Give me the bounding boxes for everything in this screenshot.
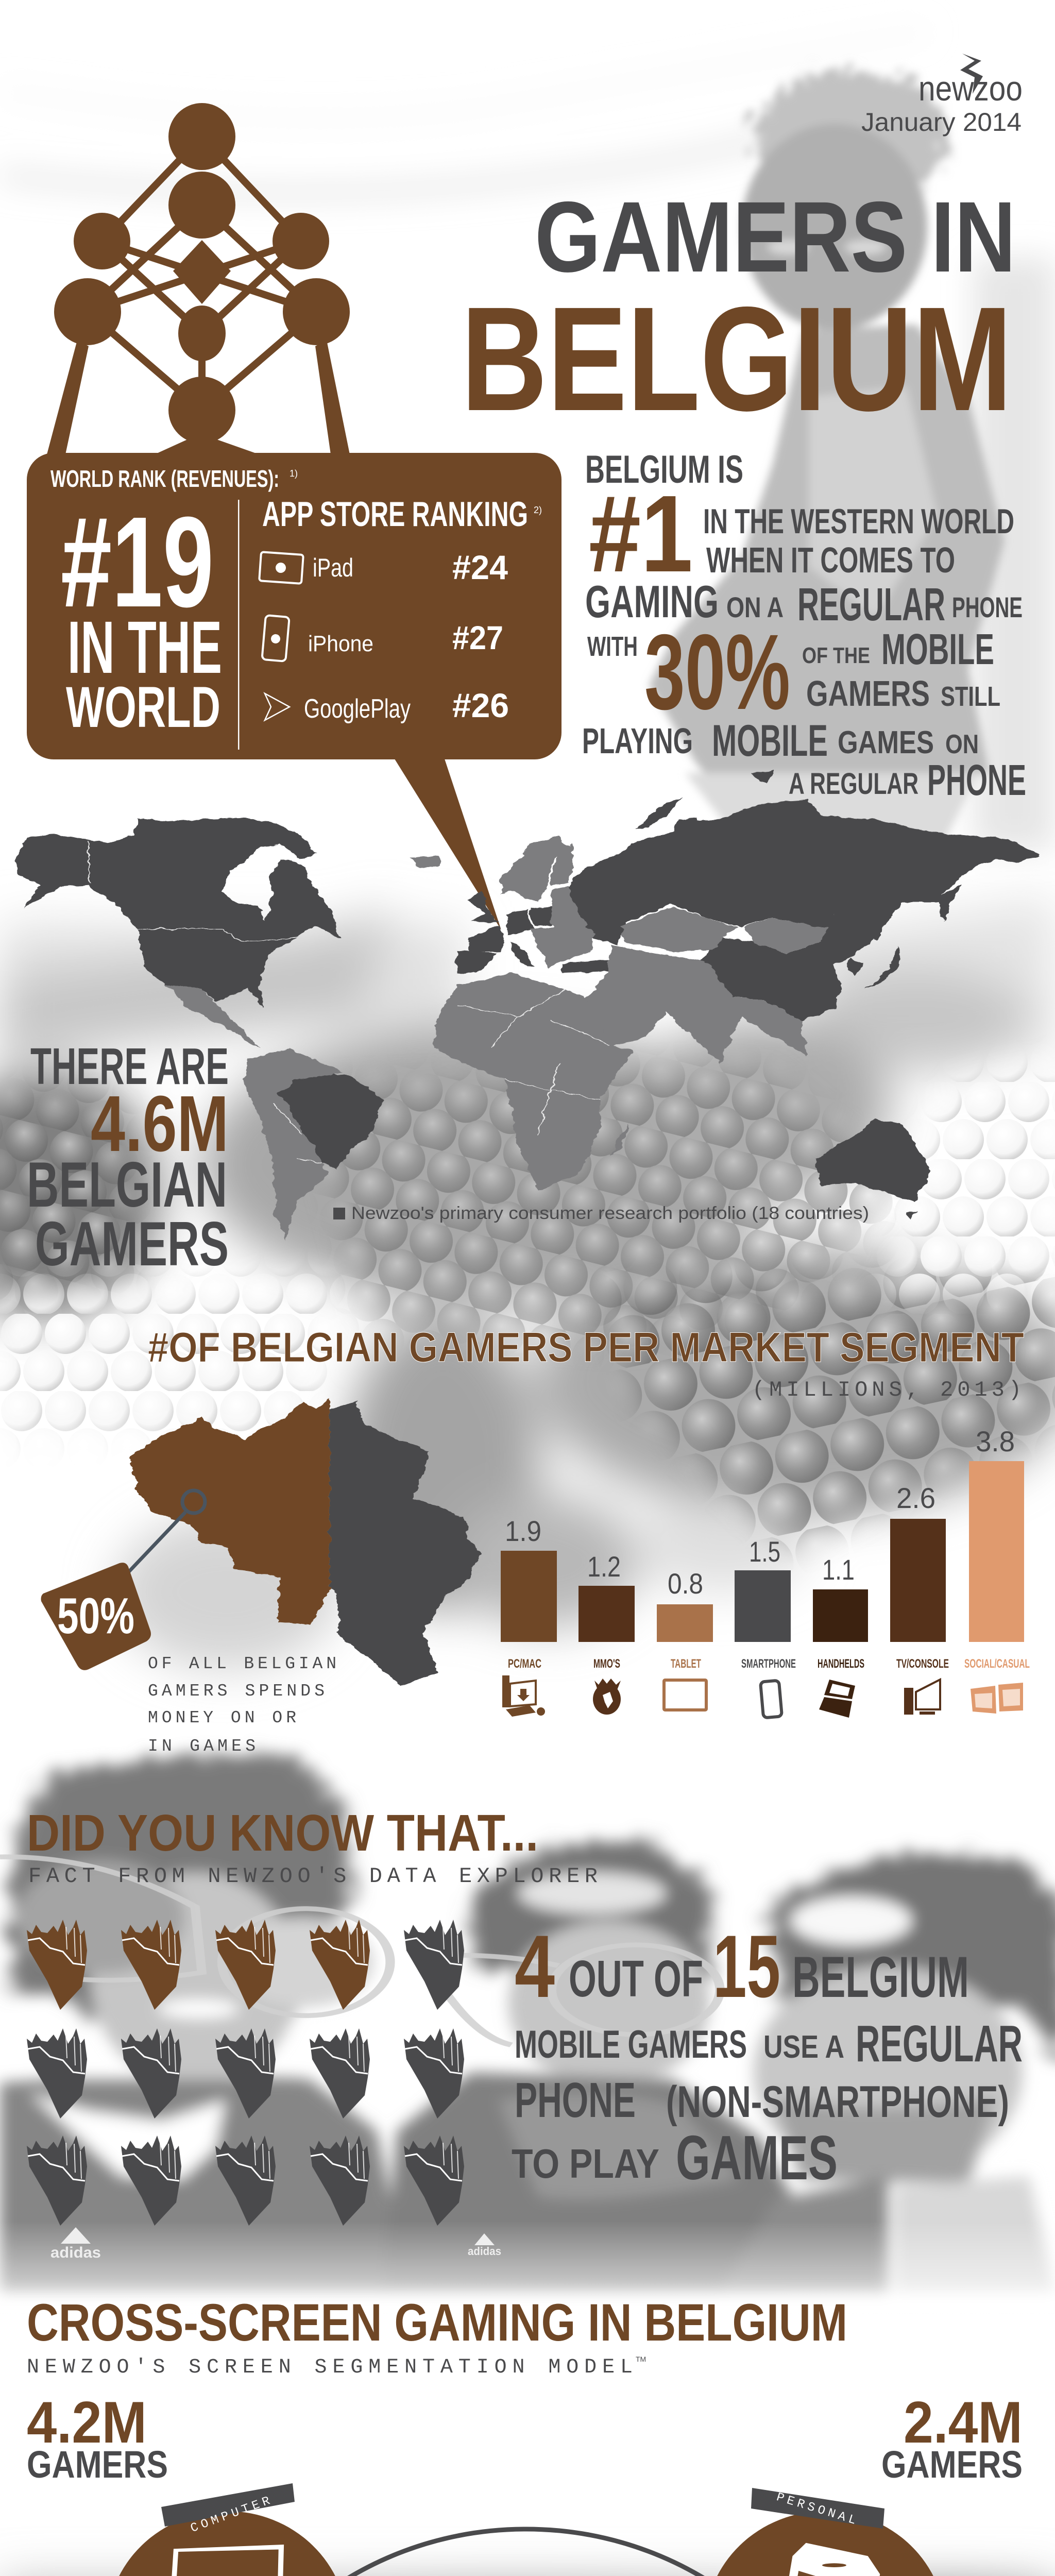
legend text: Newzoo's primary consumer research portfolio (18 countries) xyxy=(351,1204,869,1223)
text block: 4 out of 15: 15 xyxy=(713,1917,780,2016)
map: portfolio countries (dark) xyxy=(15,770,1040,1220)
bar: Handhelds: 1.1 xyxy=(822,1553,855,1586)
text block: 4 out of 15: MOBILE GAMERS xyxy=(515,2023,747,2066)
bar: Smartphone: SMARTPHONE xyxy=(741,1657,796,1671)
bar: Social/Casual: 3.8 xyxy=(976,1425,1015,1458)
text block: Belgium is #1: MOBILE xyxy=(881,625,994,673)
ribbon xyxy=(161,2483,295,2527)
bar: Handhelds: HANDHELDS xyxy=(818,1657,864,1671)
text block: Belgium is #1: WITH xyxy=(587,631,638,662)
bar chart: gamers per segment xyxy=(501,1425,1030,1671)
heading: did you know: DID YOU KNOW THAT... xyxy=(27,1804,538,1862)
bar: TV/Console xyxy=(890,1482,949,1671)
photo detail: adidas logos: adidas xyxy=(468,2245,501,2258)
text block: Belgium is #1: 30% xyxy=(644,613,790,732)
icon: Atomium xyxy=(47,103,350,454)
caption xyxy=(148,1654,336,1756)
divider xyxy=(238,500,239,750)
row: iPhone: iPhone xyxy=(308,631,373,656)
caption: MONEY ON OR xyxy=(148,1708,296,1727)
text block: Belgium is #1: ON xyxy=(945,730,979,759)
logo: newzoo top right xyxy=(918,54,1023,108)
heading: cross-screen gaming: CROSS-SCREEN GAMING IN BELGIUM xyxy=(27,2293,847,2352)
map: other countries (grey) xyxy=(165,835,827,1242)
rank value: WORLD xyxy=(66,675,220,739)
icon: phone xyxy=(770,2543,880,2576)
bar: Social/Casual xyxy=(964,1425,1030,1671)
screen: personal xyxy=(705,2488,946,2576)
background photo: Belgian supporters xyxy=(0,1750,1055,2334)
text block: 4 out of 15: GAMES xyxy=(676,2123,838,2193)
bar: MMO's xyxy=(578,1550,635,1671)
icon: MMO globe xyxy=(593,1679,621,1715)
50% value: 50% xyxy=(57,1587,134,1644)
bar: PC/MAC: PC/MAC xyxy=(508,1657,541,1671)
icon: Google Play xyxy=(265,693,290,720)
world rank heading: WORLD RANK (REVENUES): xyxy=(50,465,279,492)
app store heading: APP STORE RANKING xyxy=(262,495,528,534)
world rank heading: 1) xyxy=(290,468,298,479)
bubble body xyxy=(27,453,561,759)
subheading: fact: FACT FROM NEWZOO'S DATA EXPLORER xyxy=(28,1864,598,1889)
app store heading: 2) xyxy=(534,505,542,515)
text block: 4 out of 15 xyxy=(512,1917,1023,2193)
row: GooglePlay xyxy=(265,686,509,724)
bar: MMO's: MMO'S xyxy=(593,1657,620,1671)
text block: 4 out of 15: 4 xyxy=(515,1917,555,2016)
fries: remaining xyxy=(27,1920,464,2226)
text block: Belgium is #1: STILL xyxy=(941,681,1000,712)
photo detail: adidas logos: adidas xyxy=(50,2244,101,2261)
icon: social casual xyxy=(971,1683,1023,1714)
50% tag xyxy=(41,1563,151,1670)
bar: PC/MAC: 1.9 xyxy=(505,1515,541,1547)
icon: monitor and keyboard xyxy=(149,2545,284,2576)
bar: Handhelds xyxy=(813,1553,868,1671)
stat: 4.6M Belgian gamers: GAMERS xyxy=(35,1209,229,1279)
stat: 4.6M Belgian gamers: BELGIAN xyxy=(27,1149,227,1221)
text block: 4 out of 15: BELGIUM xyxy=(792,1945,969,2009)
row: iPhone xyxy=(262,615,503,662)
rank value: IN THE xyxy=(67,606,222,689)
text block: Belgium is #1: PHONE xyxy=(952,591,1023,623)
stat: 4.6M Belgian gamers xyxy=(27,1038,229,1279)
Wallonia half xyxy=(330,1401,481,1686)
text block: Belgium is #1: OF THE xyxy=(802,643,870,668)
diagram: connecting rings xyxy=(195,2529,857,2576)
icon: newzoo mark xyxy=(960,54,983,94)
legend swatch xyxy=(333,1208,345,1219)
text block: Belgium is #1: WHEN IT COMES TO xyxy=(706,540,955,580)
map of Belgium xyxy=(128,1398,481,1686)
stat: computer gamers: 4.2M xyxy=(27,2390,147,2455)
photo detail: oversized glasses xyxy=(0,1857,720,2045)
text block: Belgium is #1: #1 xyxy=(589,472,693,595)
row: GooglePlay: GooglePlay xyxy=(304,694,411,724)
text block: 4 out of 15: USE A xyxy=(763,2029,844,2065)
text block: Belgium is #1: GAMES xyxy=(838,725,934,760)
icon: PC xyxy=(502,1675,545,1717)
photo detail: adidas logos xyxy=(50,2227,501,2261)
icon: iPad xyxy=(259,552,303,584)
world map xyxy=(15,770,1040,1242)
stat: personal gamers xyxy=(881,2390,1023,2486)
title xyxy=(461,181,1016,442)
subheading: screen segmentation: NEWZOO'S SCREEN SEGMENTATION MODEL xyxy=(27,2356,633,2379)
locator ring and leader line xyxy=(127,1490,205,1574)
icon: handheld console xyxy=(819,1680,855,1718)
bar: TV/Console: TV/CONSOLE xyxy=(896,1657,949,1671)
rank value: #19 xyxy=(61,490,214,634)
stat: personal gamers: GAMERS xyxy=(881,2443,1023,2486)
text block: Belgium is #1: REGULAR xyxy=(797,579,945,631)
text block: 4 out of 15: TO PLAY xyxy=(512,2141,659,2187)
text block: 4 out of 15: OUT OF xyxy=(569,1950,703,2008)
bar: Tablet: 0.8 xyxy=(668,1567,703,1600)
text block: Belgium is #1: A REGULAR xyxy=(789,767,918,801)
text block: Belgium is #1: GAMING xyxy=(585,576,719,627)
Flanders half xyxy=(128,1398,330,1625)
caption: OF ALL BELGIAN xyxy=(148,1654,336,1673)
stat: personal gamers: 2.4M xyxy=(904,2390,1023,2455)
text block: Belgium is #1: MOBILE xyxy=(712,716,828,766)
ribbon label: PERSONAL xyxy=(775,2490,858,2528)
bar: Tablet xyxy=(657,1567,713,1671)
text block: Belgium is #1: GAMERS xyxy=(806,673,930,714)
screen: computer xyxy=(107,2483,348,2576)
text block: 4 out of 15: PHONE xyxy=(515,2073,636,2128)
text block: Belgium is #1 xyxy=(582,448,1026,804)
caption: GAMERS SPENDS xyxy=(148,1682,325,1701)
callout: 50% of gamers spend xyxy=(41,1490,336,1756)
row: iPad: iPad xyxy=(313,553,353,582)
map: country borders xyxy=(89,841,609,1163)
ribbon label: COMPUTER xyxy=(189,2494,272,2536)
background photo: Manneken Pis statue xyxy=(0,31,1055,850)
row: iPhone: #27 xyxy=(452,619,503,656)
row: GooglePlay: #26 xyxy=(452,686,509,724)
newzoo wordmark: newzoo xyxy=(918,69,1023,108)
photo fade toward next section xyxy=(0,2221,1055,2334)
icon: iPhone xyxy=(262,615,290,662)
background photo: chocolate shop xyxy=(0,896,1055,1669)
stat: computer gamers: GAMERS xyxy=(27,2443,168,2486)
bar: Smartphone: 1.5 xyxy=(749,1535,780,1568)
map legend xyxy=(333,1204,869,1223)
stat: 4.6M Belgian gamers: 4.6M xyxy=(91,1079,229,1168)
icon: tablet xyxy=(664,1680,706,1710)
icon: TV console xyxy=(904,1680,940,1715)
bar: TV/Console: 2.6 xyxy=(896,1482,935,1514)
rank value xyxy=(61,490,222,739)
stat: 4.6M Belgian gamers: THERE ARE xyxy=(30,1038,229,1095)
row: iPad: #24 xyxy=(452,548,508,586)
bar: Smartphone xyxy=(735,1535,796,1671)
fries: highlighted xyxy=(27,1920,370,2010)
subheading: screen segmentation: TM xyxy=(636,2355,646,2363)
caption: IN GAMES xyxy=(148,1737,256,1756)
bar: PC/MAC xyxy=(501,1515,557,1671)
circle xyxy=(107,2511,348,2576)
subheading: millions 2013: (MILLIONS, 2013) xyxy=(752,1378,1022,1402)
panel: world rank speech bubble xyxy=(27,453,561,930)
row: iPad xyxy=(259,548,508,586)
text block: Belgium is #1: ON A xyxy=(726,591,784,623)
text block: Belgium is #1: BELGIUM IS xyxy=(585,448,743,492)
text block: Belgium is #1: PLAYING xyxy=(582,721,693,761)
date: January 2014 xyxy=(861,108,1022,137)
icon: smartphone xyxy=(760,1681,782,1718)
bubble tail xyxy=(394,757,501,930)
bar: Tablet: TABLET xyxy=(671,1657,701,1671)
pictogram: 4 of 15 fries xyxy=(27,1920,464,2226)
circle xyxy=(705,2511,946,2576)
ribbon xyxy=(751,2488,884,2529)
bar: MMO's: 1.2 xyxy=(587,1550,621,1583)
stat: computer gamers xyxy=(27,2390,168,2486)
